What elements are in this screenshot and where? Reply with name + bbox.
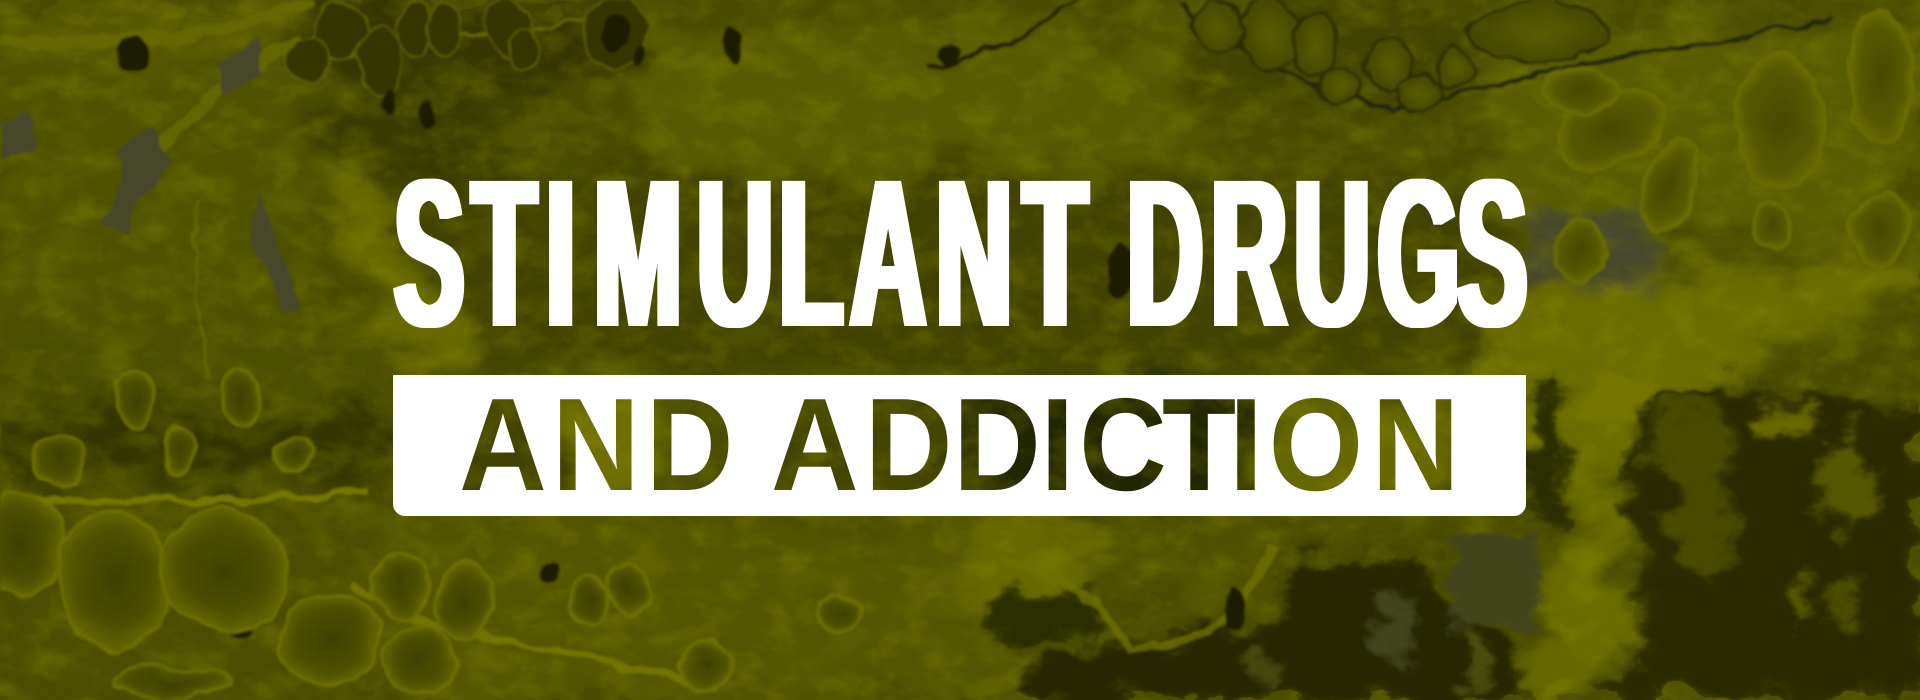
gray patches [105, 125, 170, 230]
cells lower left [0, 370, 862, 699]
cells top right [1195, 0, 1610, 113]
cells top left/centre [288, 0, 647, 94]
dark lines [1180, 0, 1830, 110]
bright curves [0, 490, 370, 505]
tones hidden behind the banner lettering [960, 385, 1250, 505]
cells right [1545, 10, 1912, 280]
subtitle banner: white box with cut-out AND ADDICTION [393, 375, 1526, 516]
title: STIMULANT DRUGS: STIMULANT DRUGS [394, 136, 1527, 372]
